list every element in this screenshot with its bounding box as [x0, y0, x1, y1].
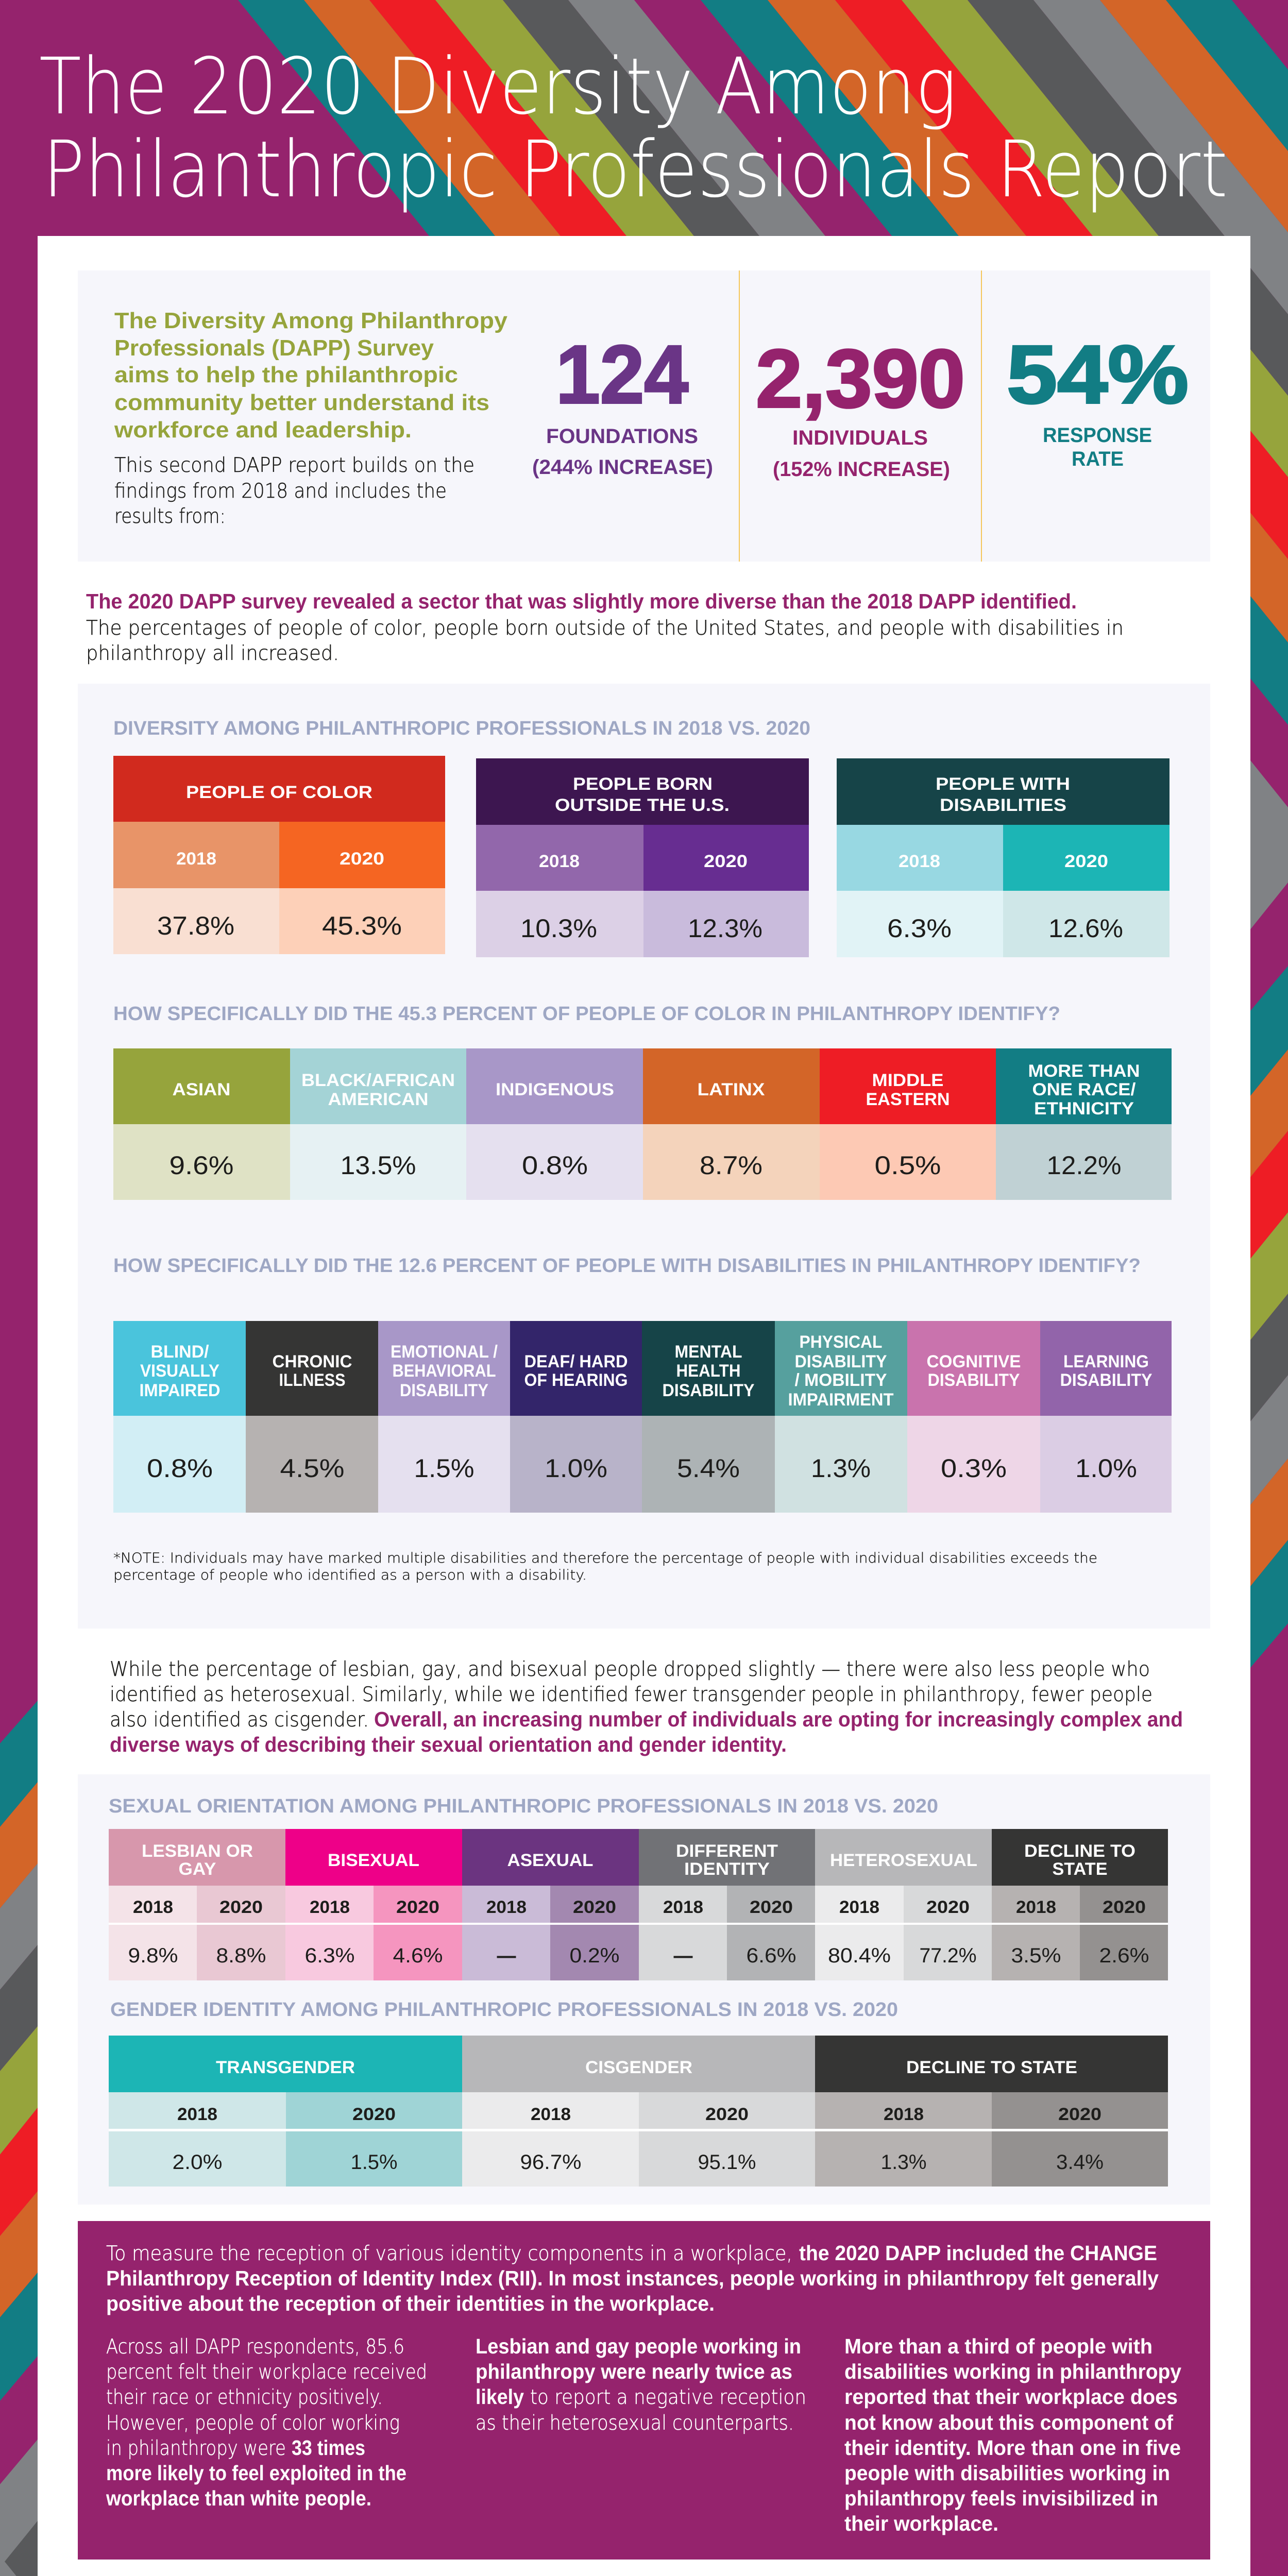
table: sexual orientation: 6.3% — [305, 1944, 354, 1967]
table: people of color breakdown: ONE RACE/ — [1032, 1080, 1136, 1099]
table: disabilities breakdown: 1.0% — [1075, 1454, 1137, 1483]
stat: individuals: INDIVIDUALS — [792, 427, 928, 449]
table: gender identity: DECLINE TO STATE — [906, 2058, 1077, 2077]
table: sexual orientation: — — [497, 1944, 516, 1967]
table: people with disabilities: 2018 — [899, 852, 940, 871]
intro heading: Professionals (DAPP) Survey — [114, 335, 434, 361]
table: gender identity: TRANSGENDER — [216, 2058, 355, 2077]
table: people of color breakdown: 9.6% — [169, 1151, 234, 1180]
text block: disabilities finding: philanthropy feels invisibilized in — [844, 2486, 1158, 2510]
intro heading: aims to help the philanthropic — [114, 362, 458, 387]
intro body text — [114, 454, 474, 528]
stat: foundations — [532, 328, 713, 479]
text block: lesbian and gay finding: as their heterosexual counterparts. — [476, 2412, 794, 2435]
table: sexual orientation: HETEROSEXUAL — [830, 1851, 977, 1870]
table: people born outside the U.S.: 2018 — [539, 852, 580, 871]
intro body text: results from: — [114, 505, 226, 528]
table: disabilities breakdown: 5.4% — [677, 1454, 740, 1483]
table: sexual orientation: 2018 — [1016, 1897, 1056, 1917]
table: people of color breakdown: AMERICAN — [328, 1090, 429, 1109]
text block: disabilities finding — [844, 2334, 1181, 2535]
table: gender identity: CISGENDER — [585, 2058, 692, 2077]
table: sexual orientation: 2020 — [1103, 1897, 1146, 1917]
text block: sector summary: The percentages of people of color, people born outside of the United States, and people with disabilities in — [86, 617, 1124, 640]
table: people born outside the U.S.: 12.3% — [688, 914, 762, 943]
panel: diversity tables — [78, 684, 1210, 1629]
table: sexual orientation: LESBIAN OR — [142, 1841, 253, 1861]
table: sexual orientation: 2020 — [573, 1897, 616, 1917]
table: sexual orientation: GAY — [178, 1859, 216, 1879]
table: sexual orientation: 2018 — [133, 1897, 173, 1917]
table: sexual orientation: 4.6% — [393, 1944, 443, 1967]
table: gender identity: 2018 — [884, 2105, 924, 2124]
table: gender identity: 2020 — [1058, 2105, 1101, 2124]
table: disabilities breakdown: 4.5% — [280, 1454, 344, 1483]
table: disabilities breakdown: 1.5% — [414, 1454, 474, 1483]
heading: people of color breakdown: HOW SPECIFICALLY DID THE 45.3 PERCENT OF PEOPLE OF COLOR IN PHILANTHROPY IDENTIFY? — [113, 1003, 1060, 1025]
text block: lesbian and gay finding: philanthropy were nearly twice as — [476, 2360, 792, 2383]
text block: lesbian and gay finding — [476, 2334, 806, 2435]
footnote — [113, 1550, 1097, 1583]
table: gender identity: 2.0% — [172, 2151, 223, 2174]
text block: RII intro — [106, 2241, 1159, 2315]
table: sexual orientation: DIFFERENT — [676, 1841, 778, 1861]
table: people of color breakdown: INDIGENOUS — [496, 1080, 614, 1099]
text block: race and ethnicity finding: their race or ethnicity positively. — [106, 2386, 383, 2409]
stat: individuals — [756, 332, 965, 481]
table: sexual orientation: 2018 — [310, 1897, 350, 1917]
table: people with disabilities: 12.6% — [1048, 914, 1123, 943]
table: disabilities breakdown: OF HEARING — [524, 1370, 628, 1390]
table: disabilities breakdown: ILLNESS — [279, 1370, 345, 1390]
table: disabilities breakdown: COGNITIVE — [926, 1352, 1021, 1371]
text block: sector summary: philanthropy all increased. — [86, 642, 339, 665]
intro heading: The Diversity Among Philanthropy — [114, 308, 508, 333]
table: disabilities breakdown: 1.0% — [545, 1454, 607, 1483]
table: gender identity — [109, 2036, 1168, 2187]
table: sexual orientation: ASEXUAL — [507, 1851, 594, 1870]
text block: orientation and gender summary: diverse ways of describing their sexual orientation and gender identity. — [110, 1733, 787, 1756]
table: disabilities breakdown: DISABILITY — [927, 1370, 1020, 1390]
table: people of color breakdown: 12.2% — [1047, 1151, 1121, 1180]
table: gender identity: 3.4% — [1056, 2151, 1104, 2174]
table: people of color — [113, 756, 445, 954]
table: people of color breakdown: 13.5% — [340, 1151, 416, 1180]
text block: orientation and gender summary: While the percentage of lesbian, gay, and bisexual people dropped slightly — there were also less people who — [110, 1658, 1150, 1681]
table: people born outside the U.S.: 10.3% — [520, 914, 597, 943]
text block: disabilities finding: people with disabilities working in — [844, 2461, 1170, 2485]
table: sexual orientation: 2.6% — [1099, 1944, 1149, 1967]
text block: disabilities finding: reported that their workplace does — [844, 2385, 1178, 2409]
table: people born outside the U.S.: OUTSIDE THE U.S. — [555, 795, 730, 815]
table: sexual orientation: 8.8% — [216, 1944, 266, 1967]
table: people with disabilities: PEOPLE WITH — [936, 774, 1070, 794]
table: people of color breakdown: BLACK/AFRICAN — [301, 1071, 455, 1090]
text block: RII intro: To measure the reception of various identity components in a workplace, — [106, 2242, 792, 2265]
table: disabilities breakdown — [113, 1321, 1172, 1513]
table: sexual orientation: 80.4% — [828, 1944, 891, 1967]
table: gender identity: 1.5% — [350, 2151, 398, 2174]
table: gender identity: 95.1% — [698, 2151, 756, 2174]
table: people of color breakdown: 8.7% — [700, 1151, 762, 1180]
table: sexual orientation: 9.8% — [128, 1944, 178, 1967]
text block: orientation and gender summary: identified as heterosexual. Similarly, while we identified fewer transgender people in philanthropy, fewer people — [110, 1683, 1153, 1706]
text block: race and ethnicity finding: percent felt their workplace received — [106, 2361, 427, 2384]
table: sexual orientation: — — [674, 1944, 692, 1967]
table: disabilities breakdown: IMPAIRMENT — [788, 1390, 894, 1410]
table: disabilities breakdown: 0.3% — [941, 1454, 1007, 1483]
text block: lesbian and gay finding: likely — [476, 2385, 524, 2409]
stat: response rate: RATE — [1072, 448, 1124, 470]
stat: response rate: RESPONSE — [1043, 424, 1152, 447]
table: sexual orientation — [109, 1829, 1168, 1980]
text block: race and ethnicity finding: in philanthropy were — [106, 2437, 286, 2460]
table: disabilities breakdown: EMOTIONAL / — [391, 1342, 498, 1362]
table: disabilities breakdown: MENTAL — [675, 1342, 742, 1362]
text block: disabilities finding: disabilities working in philanthropy — [844, 2360, 1181, 2383]
table: gender identity: 2020 — [352, 2105, 396, 2124]
table: disabilities breakdown: PHYSICAL — [800, 1332, 882, 1352]
text block: disabilities finding: their workplace. — [844, 2512, 998, 2535]
text block: race and ethnicity finding: more likely to feel exploited in the — [106, 2461, 406, 2485]
table: people of color breakdown — [113, 1048, 1172, 1200]
table: people of color breakdown: 0.8% — [522, 1151, 588, 1180]
table: disabilities breakdown: 1.3% — [811, 1454, 871, 1483]
stat: foundations: FOUNDATIONS — [546, 425, 698, 448]
table: sexual orientation: 2020 — [219, 1897, 263, 1917]
table: sexual orientation: 3.5% — [1011, 1944, 1061, 1967]
table: gender identity: 2020 — [705, 2105, 749, 2124]
table: disabilities breakdown: BLIND/ — [150, 1342, 209, 1362]
table: sexual orientation: 2018 — [486, 1897, 527, 1917]
table: people of color: 2020 — [340, 849, 384, 869]
table: sexual orientation: DECLINE TO — [1024, 1841, 1136, 1861]
stat: response rate — [1007, 328, 1189, 470]
table: sexual orientation: BISEXUAL — [328, 1851, 419, 1870]
table: disabilities breakdown: CHRONIC — [272, 1352, 352, 1371]
panel: reception of identity index — [78, 2221, 1210, 2560]
table: people born outside the U.S. — [476, 758, 809, 957]
panel: sexual orientation and gender identity — [78, 1774, 1210, 2205]
table: disabilities breakdown: DISABILITY — [400, 1381, 488, 1400]
stat: foundations: (244% INCREASE) — [532, 456, 713, 479]
table: disabilities breakdown: DISABILITY — [794, 1352, 887, 1371]
table: sexual orientation: 2020 — [926, 1897, 970, 1917]
intro body text: This second DAPP report builds on the — [114, 454, 474, 477]
text block: orientation and gender summary — [110, 1658, 1183, 1756]
text block: lesbian and gay finding: Lesbian and gay people working in — [476, 2334, 801, 2358]
table: people of color breakdown: MORE THAN — [1028, 1061, 1140, 1081]
intro body text: findings from 2018 and includes the — [114, 480, 447, 503]
heading: sexual orientation: SEXUAL ORIENTATION AMONG PHILANTHROPIC PROFESSIONALS IN 2018 VS. 2020 — [109, 1795, 938, 1817]
stat: individuals: (152% INCREASE) — [773, 458, 950, 481]
text block: race and ethnicity finding: Across all DAPP respondents, 85.6 — [106, 2335, 404, 2359]
text block: RII intro: positive about the reception of their identities in the workplace. — [106, 2292, 715, 2315]
text block: race and ethnicity finding: 33 times — [292, 2436, 365, 2460]
table: sexual orientation: 0.2% — [570, 1944, 619, 1967]
table: sexual orientation: 77.2% — [919, 1944, 977, 1967]
table: people of color breakdown: EASTERN — [866, 1090, 950, 1109]
table: people of color breakdown: ASIAN — [172, 1080, 231, 1099]
table: sexual orientation: 2020 — [750, 1897, 793, 1917]
table: disabilities breakdown: VISUALLY — [140, 1361, 219, 1381]
table: people with disabilities: 6.3% — [887, 914, 952, 943]
text block: disabilities finding: More than a third of people with — [844, 2334, 1153, 2358]
table: gender identity: 96.7% — [520, 2151, 581, 2174]
table: disabilities breakdown: HEALTH — [676, 1361, 741, 1381]
table: people with disabilities: 2020 — [1064, 852, 1108, 871]
text block: RII intro: Philanthropy Reception of Identity Index (RII). In most instances, people working in philanthropy felt generally — [106, 2266, 1159, 2290]
table: gender identity: 2018 — [531, 2105, 571, 2124]
table: people of color breakdown: 0.5% — [875, 1151, 941, 1180]
table: people of color: 2018 — [176, 849, 216, 869]
table: people born outside the U.S.: PEOPLE BORN — [573, 774, 713, 794]
table: disabilities breakdown: / MOBILITY — [794, 1370, 887, 1390]
heading: disabilities breakdown: HOW SPECIFICALLY DID THE 12.6 PERCENT OF PEOPLE WITH DISABILITIES IN PHILANTHROPY IDENTIFY? — [113, 1255, 1141, 1277]
table: people of color: 37.8% — [157, 911, 234, 940]
table: sexual orientation: 2018 — [663, 1897, 703, 1917]
table: sexual orientation: 6.6% — [746, 1944, 796, 1967]
table: disabilities breakdown: BEHAVIORAL — [393, 1361, 496, 1381]
text block: sector summary: The 2020 DAPP survey revealed a sector that was slightly more diverse than the 2018 DAPP identified. — [86, 589, 1077, 613]
text block: orientation and gender summary: Overall, an increasing number of individuals are opting for increasingly complex and — [374, 1707, 1183, 1731]
table: disabilities breakdown: DEAF/ HARD — [524, 1352, 628, 1371]
text block: sector summary — [86, 589, 1124, 665]
table: people of color breakdown: LATINX — [698, 1080, 765, 1099]
table: sexual orientation: 2018 — [839, 1897, 879, 1917]
stat: response rate: 54% — [1007, 328, 1189, 420]
table: sexual orientation: IDENTITY — [684, 1859, 770, 1879]
text block: race and ethnicity finding: workplace than white people. — [106, 2486, 371, 2510]
table: people with disabilities: DISABILITIES — [940, 795, 1066, 815]
footnote: percentage of people who identified as a person with a disability. — [113, 1567, 587, 1583]
table: people born outside the U.S.: 2020 — [704, 852, 748, 871]
table: people with disabilities — [837, 758, 1170, 957]
table: people of color breakdown: ETHNICITY — [1034, 1099, 1134, 1118]
stat: individuals: 2,390 — [756, 332, 965, 425]
text block: orientation and gender summary: also identified as cisgender. — [110, 1708, 369, 1732]
table: disabilities breakdown: DISABILITY — [1060, 1370, 1153, 1390]
table: gender identity: 2018 — [177, 2105, 217, 2124]
stat: foundations: 124 — [556, 328, 688, 420]
intro heading — [114, 308, 508, 443]
intro heading: workforce and leadership. — [114, 417, 412, 443]
table: people of color: 45.3% — [322, 911, 402, 940]
table: disabilities breakdown: DISABILITY — [663, 1381, 755, 1400]
intro heading: community better understand its — [114, 390, 489, 415]
table: disabilities breakdown: LEARNING — [1063, 1352, 1149, 1371]
text block: race and ethnicity finding: However, people of color working — [106, 2412, 400, 2435]
text block: disabilities finding: their identity. More than one in five — [844, 2436, 1181, 2460]
text block: RII intro: the 2020 DAPP included the CHANGE — [799, 2241, 1157, 2265]
footnote: *NOTE: Individuals may have marked multiple disabilities and therefore the percentage of people with individual disabilities exceeds the — [113, 1550, 1097, 1566]
table: people of color: PEOPLE OF COLOR — [186, 783, 372, 802]
text block: race and ethnicity finding — [106, 2335, 427, 2510]
table: sexual orientation: STATE — [1052, 1859, 1108, 1879]
table: disabilities breakdown: IMPAIRED — [139, 1381, 221, 1400]
heading: diversity 2018 vs 2020: DIVERSITY AMONG PHILANTHROPIC PROFESSIONALS IN 2018 VS. 2020 — [113, 718, 810, 739]
table: gender identity: 1.3% — [881, 2151, 926, 2174]
title: The 2020 Diversity Among — [39, 41, 957, 132]
table: disabilities breakdown: 0.8% — [147, 1454, 213, 1483]
text block: lesbian and gay finding: to report a negative reception — [530, 2386, 806, 2409]
table: sexual orientation: 2020 — [396, 1897, 439, 1917]
text block: disabilities finding: not know about this component of — [844, 2411, 1173, 2434]
panel: survey intro and key stats — [78, 270, 1210, 562]
heading: gender identity: GENDER IDENTITY AMONG PHILANTHROPIC PROFESSIONALS IN 2018 VS. 2020 — [110, 1999, 898, 2021]
title — [39, 41, 1228, 215]
table: people of color breakdown: MIDDLE — [872, 1071, 944, 1090]
